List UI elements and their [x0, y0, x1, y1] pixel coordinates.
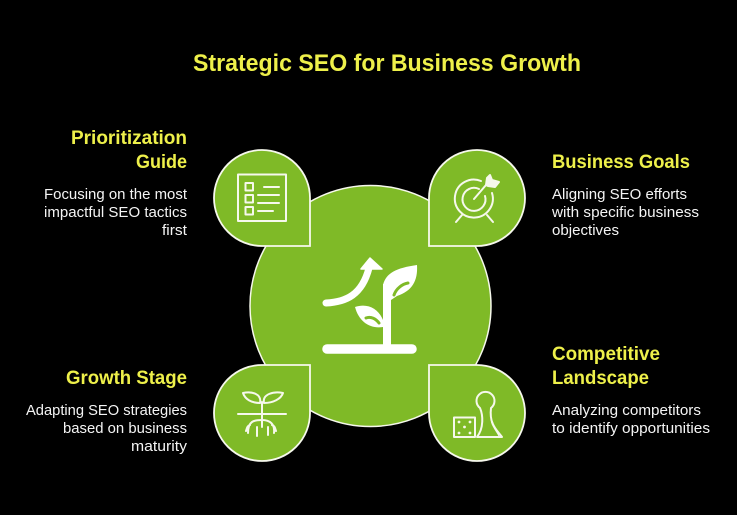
- panel: growth stage badge: [214, 365, 310, 461]
- title: Strategic SEO for Business Growth: [193, 50, 581, 77]
- text block: competitive landscape: Analyzing competitors: [552, 403, 701, 419]
- icon: target with arrow: [455, 175, 499, 222]
- text block: prioritization guide: [44, 128, 187, 239]
- text block: prioritization guide: impactful SEO tactics: [44, 205, 187, 221]
- icon: plant with growth arrow: [326, 258, 417, 349]
- text block: business goals: [551, 152, 699, 239]
- text block: competitive landscape: to identify opportunities: [552, 421, 710, 437]
- text block: growth stage: Growth Stage: [66, 368, 187, 389]
- icon: sprout with roots: [238, 392, 286, 436]
- panel: business goals badge: [429, 150, 525, 246]
- text block: prioritization guide: Focusing on the most: [44, 187, 187, 203]
- text block: growth stage: [26, 368, 188, 455]
- panel: prioritization guide badge: [214, 150, 310, 246]
- text block: business goals: Aligning SEO efforts: [552, 187, 687, 203]
- text block: prioritization guide: Prioritization: [71, 128, 187, 149]
- text block: growth stage: maturity: [131, 439, 188, 455]
- central circle: [250, 186, 491, 426]
- text block: business goals: objectives: [552, 223, 619, 239]
- text block: growth stage: based on business: [63, 421, 187, 437]
- text block: business goals: with specific business: [551, 205, 699, 221]
- text block: prioritization guide: first: [162, 223, 187, 239]
- text block: prioritization guide: Guide: [136, 152, 187, 173]
- text block: competitive landscape: Competitive: [552, 344, 660, 365]
- text block: business goals: Business Goals: [552, 152, 690, 173]
- panel: competitive landscape badge: [429, 365, 525, 461]
- icon: checklist: [238, 174, 286, 221]
- text block: competitive landscape: Landscape: [552, 368, 649, 389]
- icon: dice and game pawn: [454, 392, 502, 437]
- text block: growth stage: Adapting SEO strategies: [26, 403, 187, 419]
- text block: competitive landscape: [552, 344, 710, 437]
